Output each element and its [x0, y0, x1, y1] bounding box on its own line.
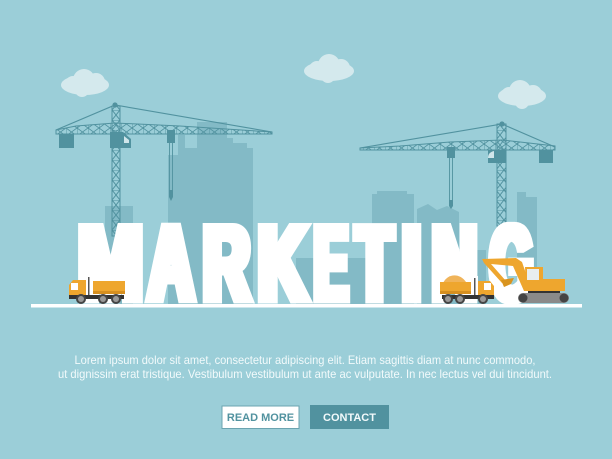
MARKETING headline: E	[314, 203, 348, 323]
paragraph text: Lorem ipsum dolor sit amet, consectetur adipiscing elit. Etiam sagittis diam at nunc commodo,	[74, 354, 536, 367]
paragraph text	[58, 354, 552, 381]
button: contact	[310, 405, 389, 429]
city skyline silhouette	[105, 122, 537, 305]
excavator	[482, 258, 569, 303]
crane jib	[56, 123, 272, 134]
crane jib	[360, 140, 555, 150]
crane cables	[56, 105, 272, 132]
MARKETING headline: A	[148, 203, 194, 323]
MARKETING headline: T	[356, 203, 392, 323]
cab	[110, 132, 131, 148]
MARKETING headline: R	[204, 203, 250, 323]
cab	[488, 150, 506, 163]
button: contact: CONTACT	[323, 412, 376, 424]
MARKETING headline: G	[490, 203, 532, 323]
crane mast	[112, 106, 120, 236]
trolley and hook	[447, 147, 455, 209]
button: read more	[222, 406, 299, 428]
paragraph text: ut dignissim erat tristique. Vestibulum vestibulum ut ante ac vulputate. In nec lectus vel dui tincidunt.	[58, 368, 552, 381]
tracks	[518, 293, 569, 303]
MARKETING headline	[78, 203, 532, 323]
body	[525, 267, 565, 291]
left crane	[56, 102, 272, 236]
cloud right	[498, 80, 546, 109]
MARKETING headline: M	[78, 203, 142, 323]
cloud left	[61, 69, 109, 97]
MARKETING headline: I	[402, 203, 420, 323]
MARKETING headline: K	[258, 203, 306, 323]
crane mast	[497, 124, 506, 226]
cloud center	[304, 54, 354, 83]
bucket	[501, 278, 514, 287]
arm	[482, 258, 532, 291]
left dump truck	[69, 275, 125, 304]
counterweight	[59, 134, 74, 148]
crane cables	[360, 124, 555, 148]
button: read more: READ MORE	[227, 412, 294, 424]
right crane	[360, 121, 555, 226]
ground line	[31, 304, 582, 308]
trolley and hook	[167, 130, 175, 201]
right dump truck	[440, 275, 494, 304]
counterweight	[539, 150, 553, 163]
MARKETING headline: N	[432, 203, 476, 323]
